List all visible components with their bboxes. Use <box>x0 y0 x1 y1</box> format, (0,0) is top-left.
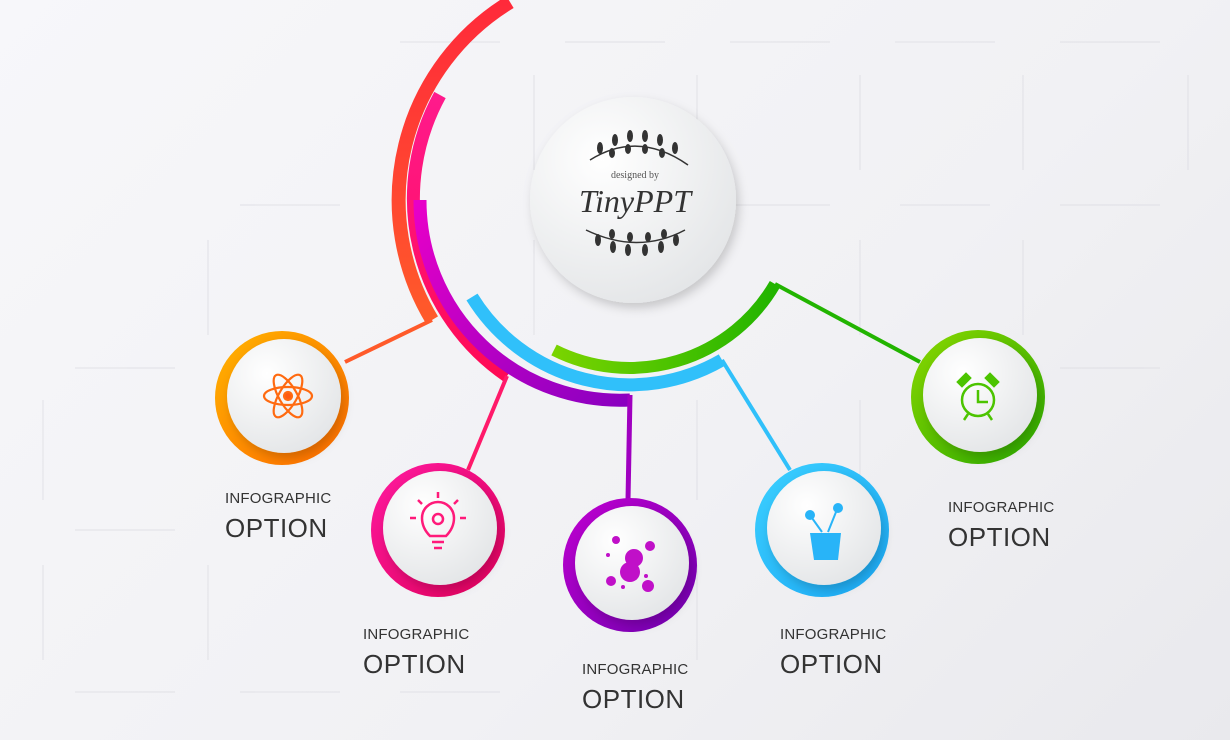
arc: purple <box>420 200 630 500</box>
logo circle: designed by <box>611 170 659 181</box>
arc: red <box>345 2 510 362</box>
circle 4: blue plant <box>755 463 889 597</box>
label 2: INFOGRAPHIC <box>363 626 469 643</box>
label 1 <box>225 490 331 543</box>
icon: alarm clock <box>958 374 998 420</box>
label 2: OPTION <box>363 649 466 679</box>
label 3: INFOGRAPHIC <box>582 661 688 678</box>
label 5 <box>948 499 1054 552</box>
icon: bubbles <box>606 536 655 592</box>
label 4 <box>780 626 886 679</box>
circle 1: orange atom <box>215 331 349 465</box>
logo circle <box>530 97 736 303</box>
arc: pink <box>413 95 507 470</box>
label 2 <box>363 626 469 679</box>
label 5: OPTION <box>948 522 1051 552</box>
label 4: OPTION <box>780 649 883 679</box>
label 5: INFOGRAPHIC <box>948 499 1054 516</box>
label 3 <box>582 661 688 714</box>
circle 2: pink bulb <box>371 463 505 597</box>
circle 5: green clock <box>911 330 1045 464</box>
icon: atom <box>264 371 312 421</box>
arc: blue <box>472 297 790 470</box>
circle 3: purple bubbles <box>563 498 697 632</box>
logo circle: TinyPPT <box>579 183 693 219</box>
icon: flower pot <box>805 503 843 560</box>
label 1: INFOGRAPHIC <box>225 490 331 507</box>
label 1: OPTION <box>225 513 328 543</box>
label 4: INFOGRAPHIC <box>780 626 886 643</box>
arc: green <box>554 284 920 368</box>
icon: light bulb <box>410 492 466 548</box>
label 3: OPTION <box>582 684 685 714</box>
